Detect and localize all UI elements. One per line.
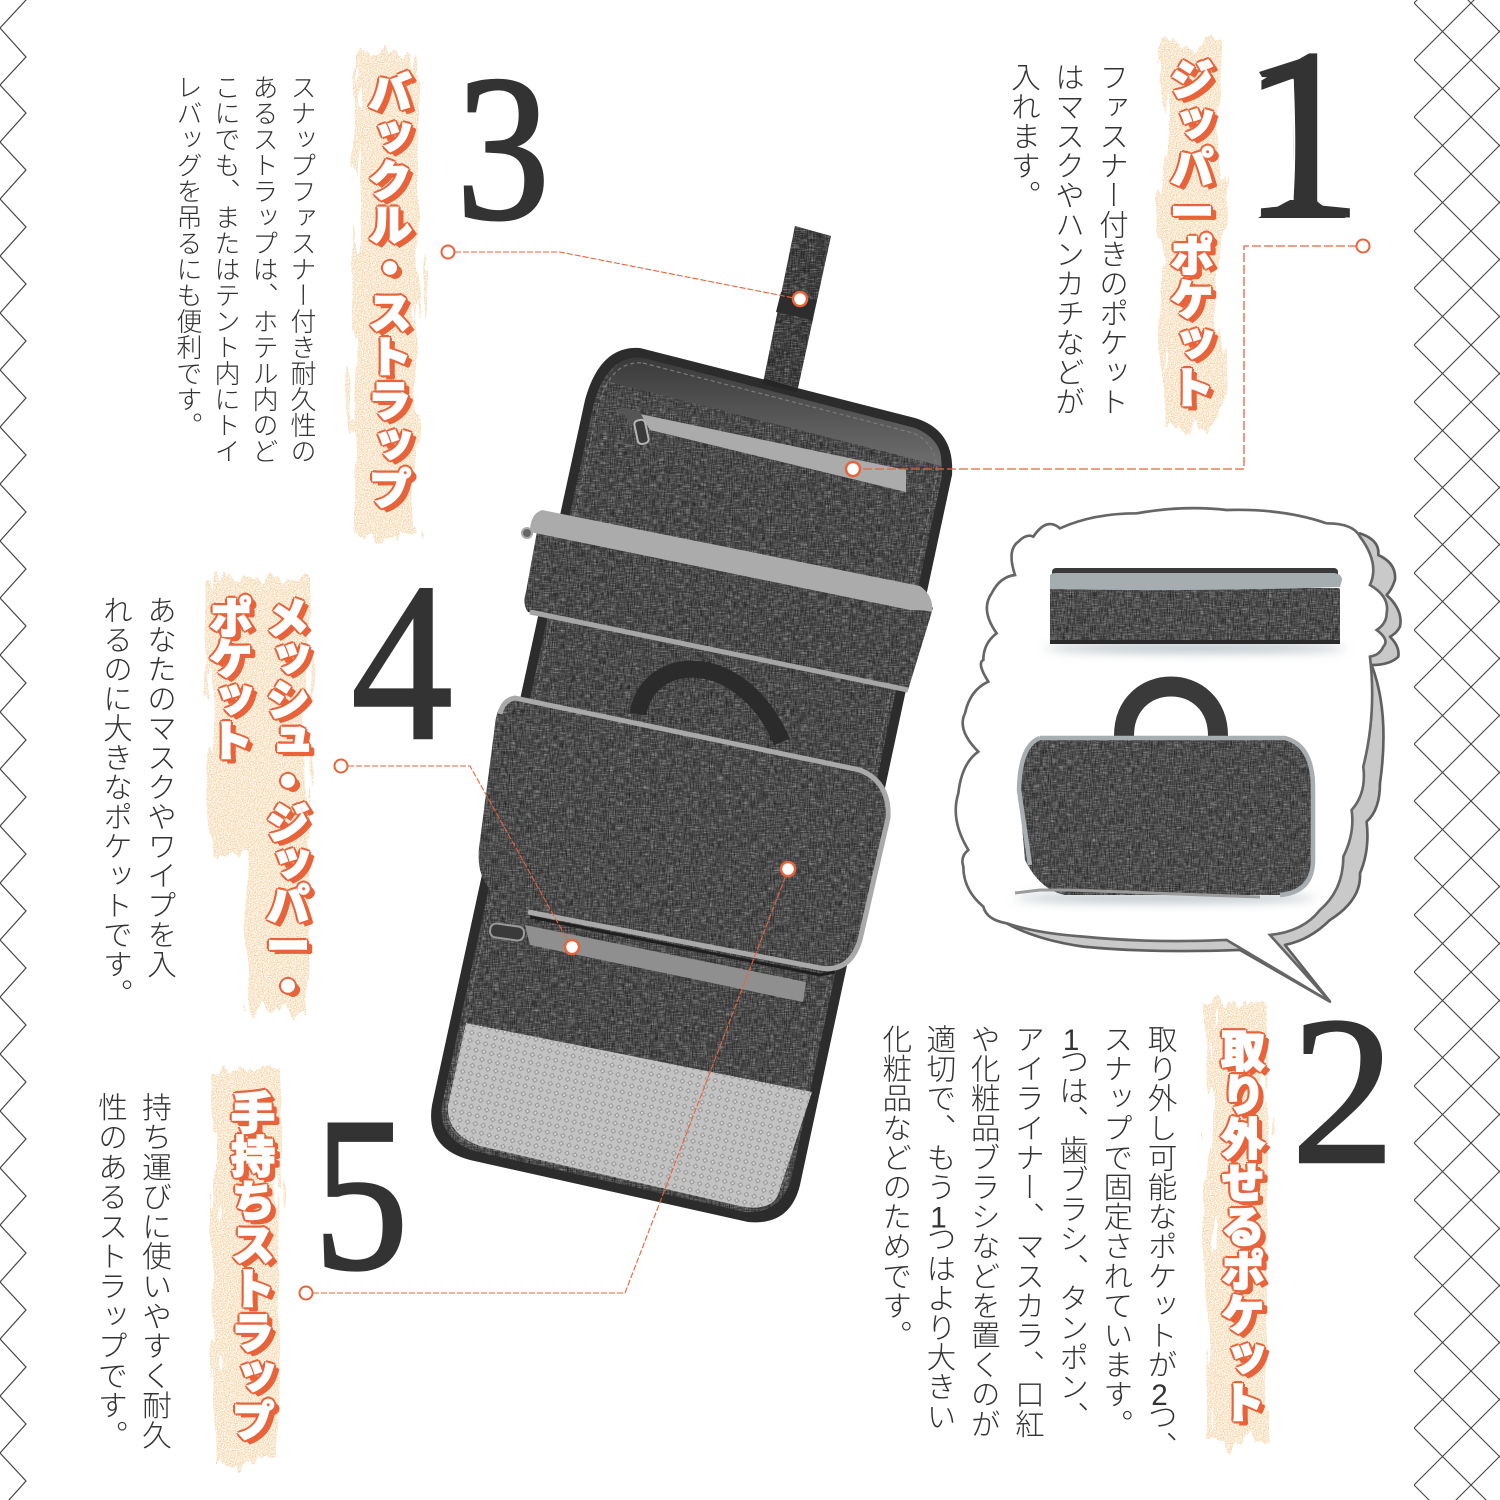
main bag: hanging toiletry organizer [431,226,952,1222]
leader line: feature 5 [300,862,795,1300]
number 3: 3 [456,33,550,263]
body text: feature 2: 1 つは、歯ブラシ、タンポン、 [1055,1024,1088,1431]
heading background brush strips [210,42,1268,1463]
background pattern: right diamond lattice [1414,0,1500,1500]
body text: feature 1 [1007,62,1128,416]
leader line: feature 4 [334,760,579,954]
body text: feature 2: 適切で、もう 1 つはより大きい [922,1024,955,1431]
inner panel [442,358,942,1212]
body text: feature 2: 化粧品などのためです。 [878,1024,911,1350]
speech bubble with detached pocket views [956,508,1401,1002]
hanging strap [764,226,831,388]
fold-out pocket handle [638,669,782,742]
heading: feature 3: バックル・ストラップ [361,70,410,510]
heading: feature 2: 取り外せるポケット [1214,1028,1263,1424]
flat pocket view [1045,568,1345,653]
top zipper [620,407,906,492]
number 4: 4 [351,536,453,787]
bag body [431,348,952,1222]
body text: feature 1: ファスナー付きのポケット [1095,62,1128,416]
heading: feature 4: ポケット [202,595,251,759]
lower zipper [489,923,806,1002]
heading: feature 1: ジッパ ー ポケット [1163,57,1212,409]
top hem band [606,357,941,466]
leader line: feature 3 [442,246,807,306]
mesh pocket [448,1023,812,1208]
body text: feature 5: 持ち運びに使いやすく耐久 [137,1092,170,1450]
heading: feature 4: メッシュ・ジッパ ー ・ [259,595,308,1005]
body text: feature 1: はマスクやハンカチなどが [1051,62,1084,416]
heading: feature 4 [202,592,315,1005]
number 2: 2 [1291,974,1395,1208]
number 5: 5 [314,1073,408,1316]
body text: feature 2: スナップで固定されています。 [1099,1024,1132,1438]
body text: feature 4: れるのに大きなポケットです。 [99,595,132,1008]
bubble outline [956,508,1387,1002]
body text: feature 5: 性のあるストラップです。 [93,1092,126,1450]
strap stitch [762,378,798,392]
body text: feature 3: あるストラップは、ホテル内のど [249,74,279,464]
body text: feature 4: あなたのマスクやワイプを入 [143,595,176,978]
body text: feature 2: や化粧品ブラシなどを置くのが [966,1024,999,1438]
body text: feature 2: 取り外し可能なポケットが 2 つ、 [1143,1024,1176,1460]
body text: feature 1: 入れます。 [1007,62,1040,210]
body text: feature 3: スナップファスナー付き耐久性の [287,74,317,464]
leader line: feature 1 [846,240,1370,476]
body text: feature 2: アイライナー、マスカラ、口紅 [1010,1024,1043,1438]
number 1: 1 [1241,0,1363,269]
body text: feature 3: こにでも、またはテント内にトイ [211,74,241,464]
pocket view with handle [1015,686,1315,903]
bubble shadow [1007,533,1401,1002]
body text: feature 2 [878,1024,1177,1460]
expanded middle pocket [522,510,933,690]
body text: feature 5 [93,1092,171,1450]
body text: feature 4 [99,595,176,1008]
body text: feature 3 [173,74,317,464]
removable front pocket [479,698,888,975]
edge stitching [447,363,937,1207]
heading: feature 5: 手持ちストラップ [224,1090,273,1442]
body text: feature 3: レバッグを吊るにも便利です。 [173,74,203,438]
background pattern: left zigzag edge [0,0,26,1500]
